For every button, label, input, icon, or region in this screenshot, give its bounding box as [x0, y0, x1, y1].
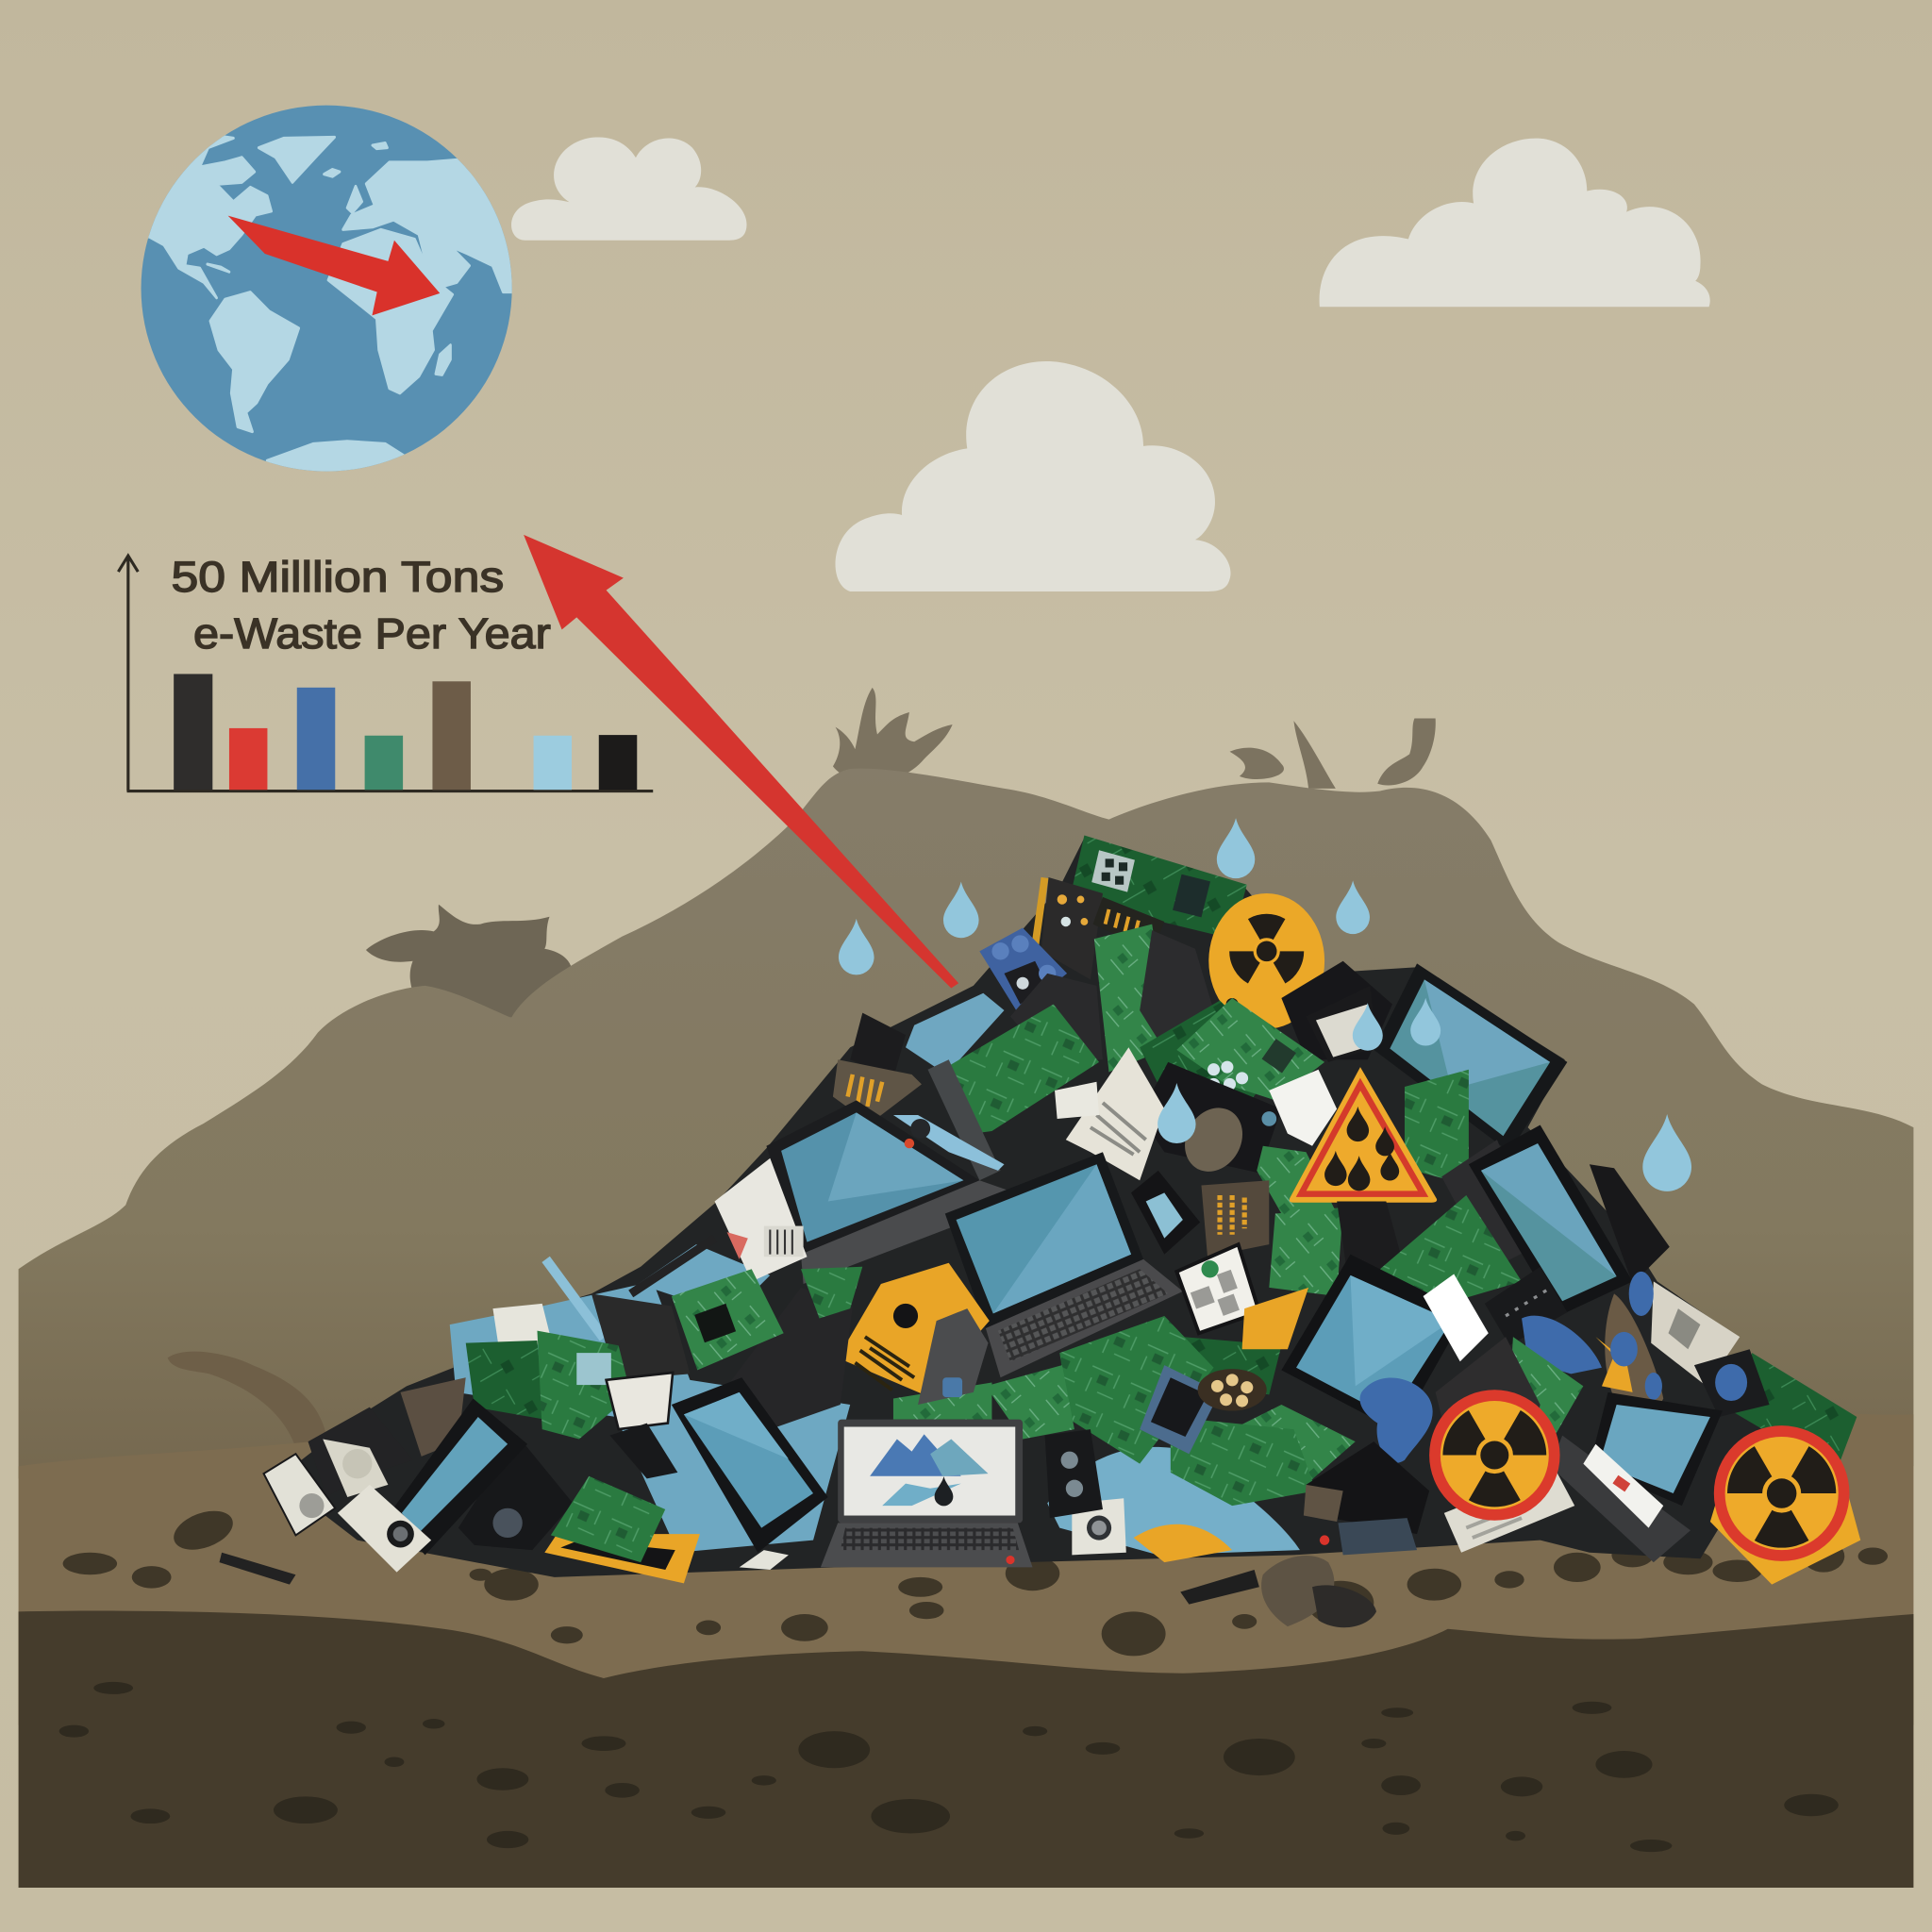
dark bar left [219, 1553, 295, 1585]
green board right centre [1269, 1208, 1343, 1296]
cloud: large top right [1320, 139, 1710, 307]
laptop keyboard [841, 1528, 1019, 1550]
small monitor [1694, 1349, 1770, 1417]
white label [1055, 1082, 1099, 1119]
dark strip [631, 1239, 715, 1293]
slate plate [1338, 1518, 1417, 1555]
board bottom centre [1171, 1417, 1316, 1506]
water drops [839, 818, 1691, 1191]
blue rod [546, 1259, 604, 1338]
board lower right of centre [1232, 1405, 1356, 1485]
blue module [979, 928, 1067, 1013]
blue blob right [1522, 1316, 1602, 1374]
laptop base [821, 1523, 1033, 1567]
cloud: small top [511, 138, 747, 241]
green board below triangle [1257, 1146, 1337, 1214]
chart heading [172, 553, 551, 658]
red indicator [1006, 1556, 1015, 1564]
small white paper [740, 1550, 789, 1570]
black wedge bottom right of centre [1306, 1441, 1429, 1534]
orange tray [544, 1534, 700, 1583]
cloud: centre [835, 361, 1231, 591]
white plate [1269, 1070, 1337, 1146]
dark plug left [610, 1424, 677, 1478]
biohazard sign [1208, 893, 1324, 1029]
tablet upper right [1374, 963, 1567, 1152]
globe ocean [142, 106, 512, 472]
green board bottom left [551, 1476, 665, 1562]
light blue mass [450, 1281, 850, 1553]
hill silhouette with debris [19, 688, 1913, 1478]
paper document [1066, 1047, 1164, 1180]
black camera square [1131, 1171, 1200, 1255]
globe red arrow [228, 216, 440, 315]
orange fragment centre right [1242, 1288, 1308, 1349]
tablet left [388, 1398, 527, 1555]
globe [137, 106, 516, 480]
warning triangle [1290, 1067, 1437, 1203]
brown module [833, 1059, 922, 1124]
grey strip [928, 1059, 1001, 1180]
router [1485, 1267, 1567, 1345]
cream box [1306, 986, 1377, 1062]
front laptop [821, 1420, 1033, 1567]
white cam lower [338, 1485, 431, 1573]
capacitor cluster [1198, 1369, 1267, 1411]
dark soil [19, 1611, 1913, 1888]
black block under module [1010, 974, 1103, 1059]
green column board [1094, 924, 1171, 1072]
white device far left [715, 1158, 808, 1281]
laptop screen [844, 1426, 1015, 1516]
grey orange device cap [918, 1308, 989, 1405]
blue diamond chip [1140, 1365, 1220, 1454]
big laptop centre [945, 1152, 1183, 1377]
white cam left [264, 1454, 335, 1535]
paper right [1651, 1281, 1740, 1386]
board centre lower [1059, 1316, 1214, 1464]
white box fragment [492, 1304, 552, 1349]
blue panel left top [906, 993, 1004, 1074]
brown rock front [1261, 1556, 1334, 1626]
brown rock [1304, 1485, 1343, 1522]
radiation sign two [1710, 1425, 1860, 1585]
radiation sign one [1429, 1390, 1560, 1521]
globe continents [137, 124, 516, 480]
dark device [727, 1288, 853, 1429]
bar chart [118, 553, 653, 791]
big red arrow [524, 535, 958, 989]
black box behind tablet [1281, 961, 1392, 1059]
cut tablet laptop left [766, 1100, 1029, 1284]
phone big centre [1281, 1255, 1466, 1432]
dark green board right of paper [1140, 1001, 1281, 1109]
small board beneath laptop [986, 1365, 1074, 1440]
blue scraps under white device [639, 1244, 770, 1296]
laptop lid [838, 1420, 1023, 1523]
chart heading: 50 Milllion Tons [172, 553, 504, 601]
right board [1405, 1070, 1469, 1185]
drive with brown disc [1140, 1062, 1281, 1182]
dark cam base [308, 1407, 413, 1497]
pile base mass [277, 838, 1855, 1577]
blue bits [1610, 1272, 1662, 1400]
black phone fragment [1045, 1429, 1103, 1518]
light green board [1176, 998, 1324, 1100]
chip module [1201, 1180, 1269, 1257]
long board diagonal [1380, 1195, 1522, 1308]
white camera bottom centre [1072, 1498, 1126, 1555]
chart heading: e-Waste Per Year [193, 609, 551, 658]
black side piece [1590, 1164, 1670, 1284]
white box left [607, 1373, 673, 1429]
white cam upper [323, 1440, 388, 1497]
black drive [1140, 930, 1214, 1059]
e-waste pile [219, 836, 1860, 1627]
small green board near orange device [801, 1267, 862, 1319]
phone left centre [672, 1377, 828, 1553]
hill debris left [366, 905, 572, 1018]
card with grey squares [1176, 1244, 1259, 1333]
red dot bottom [1320, 1535, 1329, 1545]
blue ground scrap [1047, 1447, 1300, 1555]
chart axes [118, 556, 653, 791]
right board far [1731, 1353, 1857, 1473]
dark green board left [466, 1341, 544, 1420]
dark part with dots [1029, 877, 1164, 979]
ground [19, 1411, 1913, 1725]
black speaker [458, 1436, 573, 1550]
green board grid [672, 1269, 784, 1370]
connector tool [893, 1115, 1004, 1171]
yellow fragment right [1595, 1337, 1633, 1392]
dark bar centre [1180, 1570, 1259, 1605]
orange device [838, 1263, 990, 1395]
green board left [537, 1331, 631, 1440]
brown plate left [400, 1377, 466, 1457]
paper bottom [1444, 1469, 1574, 1553]
white plate behind router [1424, 1274, 1489, 1361]
dark strap [591, 1293, 690, 1380]
orange dome [1134, 1524, 1232, 1562]
brown lump left [168, 1352, 326, 1448]
dark hub [1337, 1201, 1405, 1288]
dark device left [850, 1013, 906, 1078]
dark rock front [1312, 1585, 1376, 1627]
blue splat centre [1360, 1378, 1433, 1463]
phone right [1469, 1124, 1633, 1316]
ground stones [63, 1504, 1888, 1656]
board right lower [1509, 1337, 1583, 1436]
board under card [1183, 1337, 1281, 1395]
dark device lower right [1436, 1337, 1541, 1466]
hill [19, 769, 1913, 1478]
board under orange device [893, 1382, 991, 1420]
circuit board top [1070, 836, 1247, 939]
soil stones [59, 1682, 1839, 1852]
chart bars [174, 674, 637, 790]
grey remote [1550, 1436, 1690, 1562]
brown blob right [1605, 1293, 1663, 1415]
dark panel [1441, 1140, 1541, 1269]
hill debris top [833, 688, 1436, 789]
tablet lower right [1590, 1392, 1723, 1506]
green board upper centre [942, 1004, 1099, 1134]
